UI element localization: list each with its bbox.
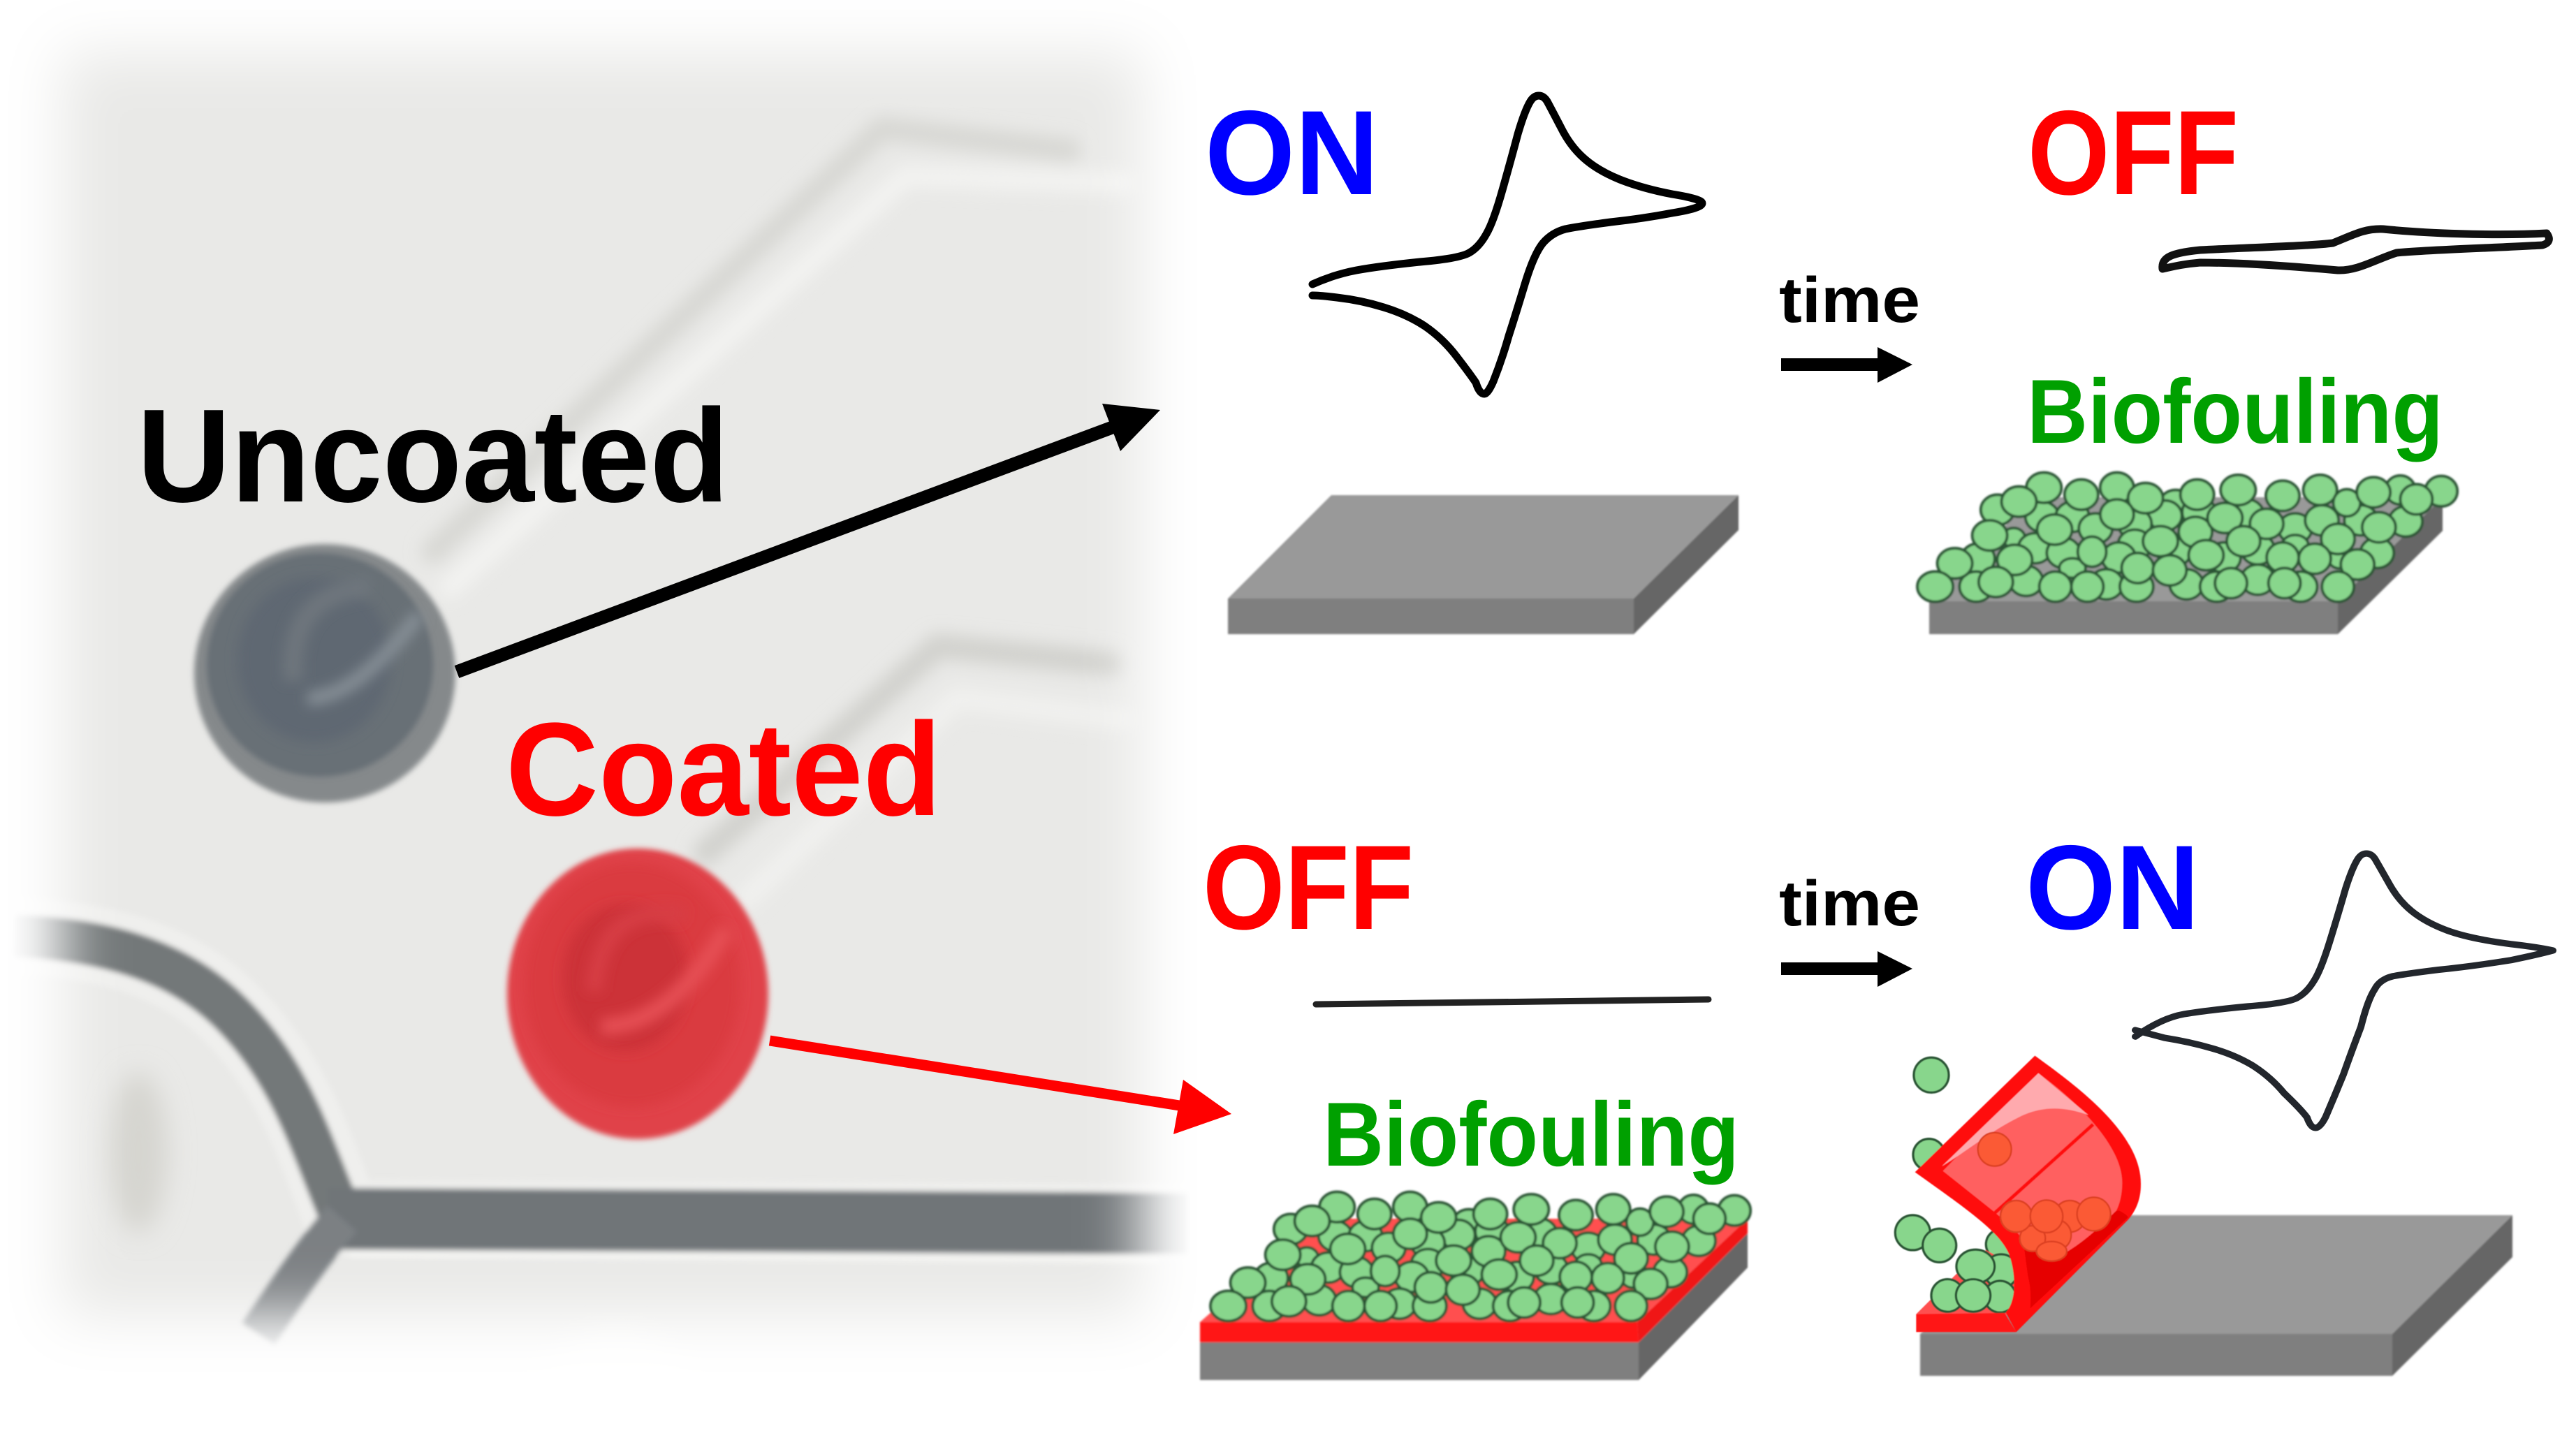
icon: peeling red film releasing biofouling [1895, 1056, 2141, 1332]
label: OFF (upper right): OFF [2028, 86, 2239, 220]
label: time (upper): time [1779, 265, 1920, 336]
arrow: time (lower) [1781, 951, 1912, 987]
cells seen through film [1978, 1133, 2111, 1261]
label: ON (lower right): ON [2026, 821, 2200, 955]
film fold line [1995, 1124, 2093, 1213]
dark channel network [14, 936, 1187, 1334]
panel: photo of sensor chip [20, 42, 1185, 1345]
slab: bare gray electrode (upper left) [1228, 495, 1739, 634]
slab: coated with biofouling (lower left) [1200, 1192, 1750, 1380]
label: Coated: Coated [506, 696, 942, 844]
film highlight [1942, 1073, 2088, 1166]
film base [1916, 1250, 2017, 1315]
chart: flat voltammogram line (lower left) [1316, 999, 1708, 1004]
released green cells [1895, 1057, 2017, 1262]
chart: voltammogram, flat (upper right) [2162, 229, 2549, 270]
label: OFF (lower left): OFF [1203, 821, 1414, 955]
slab: gray electrode with peeling coating (lower right) [1920, 1215, 2512, 1376]
curled film body [1915, 1056, 2141, 1332]
arrow: uncoated to upper panel [457, 404, 1160, 672]
label: Biofouling (upper): Biofouling [2027, 360, 2443, 462]
slab with biofouling layer (upper right) [1917, 473, 2457, 634]
faint electrode trace: upper [433, 129, 1125, 899]
label: Biofouling (lower): Biofouling [1323, 1083, 1739, 1185]
label: ON (upper left): ON [1205, 86, 1379, 220]
chart: voltammogram, strong peak (upper) [1312, 96, 1702, 394]
icon: uncoated gray electrode [194, 544, 455, 802]
film inner pane [1943, 1073, 2122, 1261]
icon: coated red electrode [507, 849, 768, 1139]
faint lower marks [105, 1073, 172, 1232]
arrow: coated to lower panel [770, 1041, 1231, 1134]
arrow: time (upper) [1781, 347, 1912, 383]
label: Uncoated: Uncoated [137, 382, 729, 530]
chart: voltammogram, recovered peak (lower right) [2135, 853, 2553, 1128]
label: time (lower): time [1779, 868, 1920, 939]
